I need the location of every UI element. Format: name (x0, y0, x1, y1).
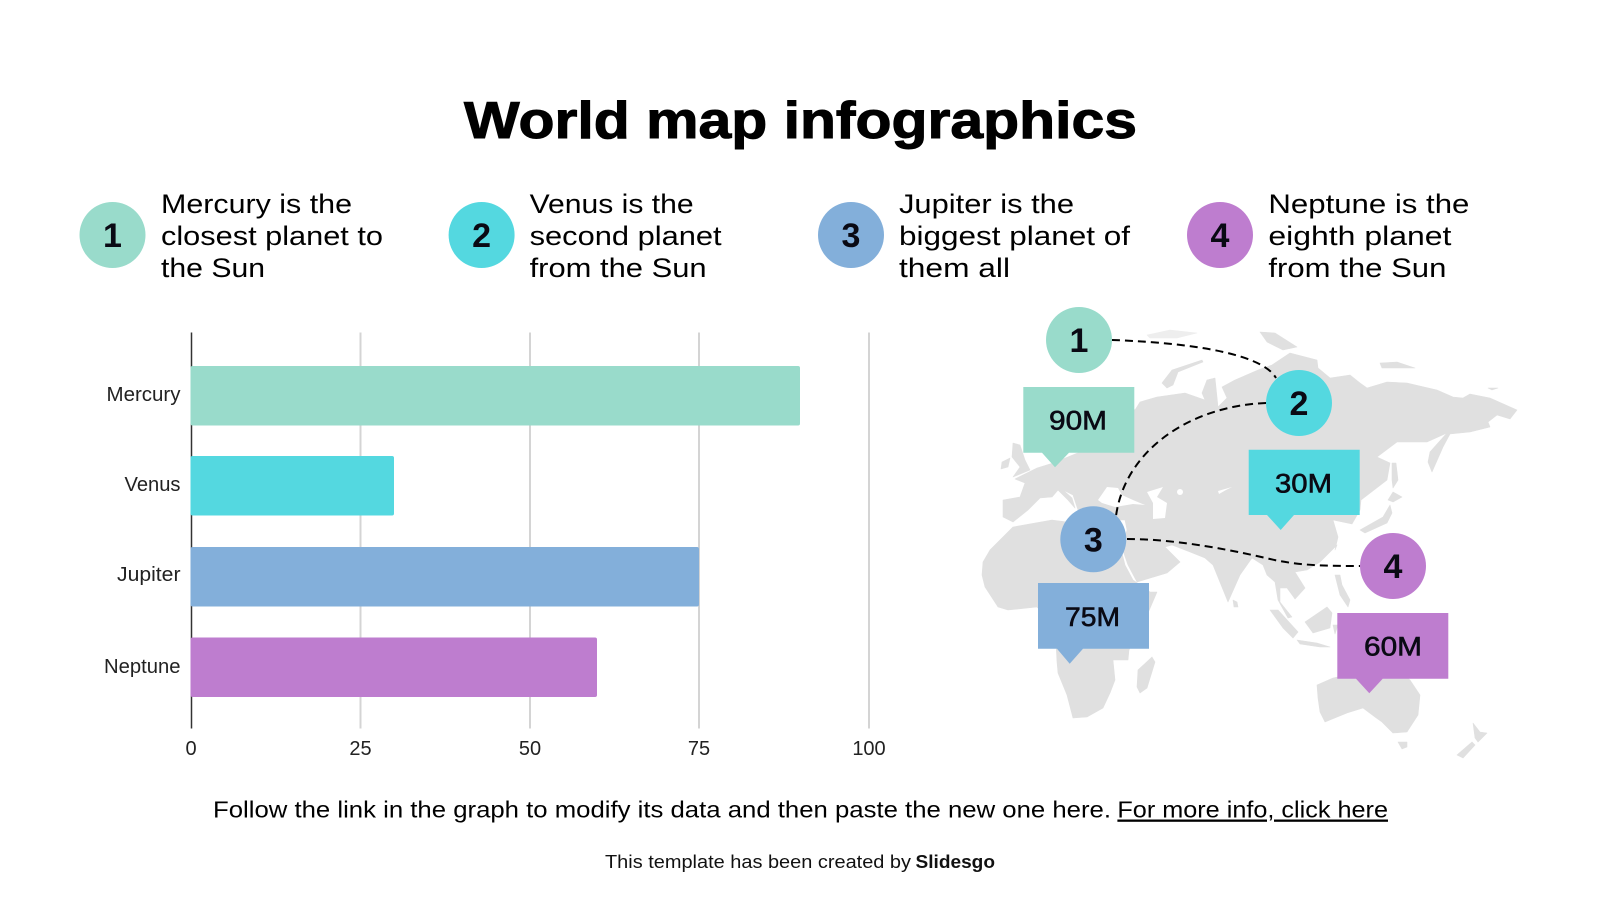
callout: 90M: 90M (1049, 405, 1107, 435)
legend text 1: Mercury is the (161, 189, 352, 219)
value axis labels: 0 (185, 738, 197, 760)
bar chart (104, 332, 886, 760)
legend text 4: eighth planet (1268, 221, 1452, 251)
map marker 1: 1 (1070, 322, 1088, 360)
callout: 75M: 75M (1065, 602, 1120, 632)
legend item 1: Mercury (80, 189, 383, 283)
map marker 2 (1266, 370, 1332, 436)
legend text 1 (161, 189, 383, 283)
title: World map infographics (464, 92, 1137, 150)
bar: Mercury 90 (190, 366, 800, 426)
category labels: Neptune (104, 656, 180, 678)
map marker 1 (1046, 307, 1112, 373)
legend badge 4 (1187, 202, 1253, 268)
legend text 1: the Sun (161, 253, 265, 283)
value axis labels: 25 (349, 738, 372, 760)
category labels: Mercury (106, 384, 180, 406)
callout: 75M (1038, 583, 1149, 664)
footer instruction text: Follow the link in the graph to modify its data and then paste the new one here. (213, 796, 1111, 822)
category labels (104, 384, 181, 678)
map marker 4: 4 (1384, 548, 1403, 586)
route: 2 to 3 (1116, 403, 1266, 516)
legend text 2: second planet (530, 221, 722, 251)
map marker 3 (1060, 506, 1126, 572)
bar: Jupiter 75 (190, 547, 699, 606)
value axis labels: 100 (852, 738, 886, 760)
legend item 3: Jupiter (818, 189, 1131, 283)
inland seas (1098, 487, 1232, 519)
legend badge 3: 3 (842, 217, 860, 255)
landmass: Australia (1317, 672, 1420, 733)
legend text 2 (530, 189, 722, 283)
callout: 90M (1023, 387, 1134, 467)
landmass: Eurasia (1003, 353, 1517, 618)
callout: 60M: 60M (1364, 632, 1422, 662)
legend text 2: from the Sun (530, 253, 707, 283)
legend badge 1 (80, 202, 146, 268)
legend text 4: Neptune is the (1268, 189, 1469, 219)
callout: 30M: 30M (1275, 468, 1332, 498)
footer instruction text (213, 796, 1388, 822)
legend item 2: Venus (449, 189, 722, 283)
legend text 3: Jupiter is the (899, 189, 1074, 219)
route: 3 to 4 (1127, 539, 1360, 566)
legend badge 2: 2 (472, 217, 491, 255)
credit line: Slidesgo (916, 851, 995, 872)
legend text 2: Venus is the (530, 189, 694, 219)
link text: For more info, click here (1117, 796, 1388, 822)
map marker 4 (1360, 533, 1426, 599)
bar: Venus 30 (190, 456, 394, 516)
legend text 4: from the Sun (1268, 253, 1446, 283)
legend badge 3 (818, 202, 884, 268)
legend badge 1: 1 (103, 217, 122, 255)
callout: 30M (1249, 450, 1360, 530)
legend text 3: biggest planet of (899, 221, 1131, 251)
value axis labels: 75 (688, 738, 710, 760)
route: 1 to 2 (1112, 340, 1276, 378)
callout: 60M (1337, 613, 1448, 693)
map marker 2: 2 (1290, 385, 1308, 423)
legend text 3 (899, 189, 1131, 283)
credit line: This template has been created by (605, 851, 912, 872)
legend badge 2 (449, 202, 515, 268)
category labels: Jupiter (117, 564, 181, 586)
category labels: Venus (124, 474, 180, 496)
islands (1001, 330, 1498, 758)
landmass: Africa (982, 520, 1157, 718)
world map: Europe, Asia, Africa, Oceania (982, 307, 1517, 758)
legend badge 4: 4 (1211, 217, 1230, 255)
legend text 4 (1268, 189, 1469, 283)
value axis labels: 50 (519, 738, 541, 760)
bar: Neptune 60 (190, 638, 597, 697)
legend text 1: closest planet to (161, 221, 383, 251)
value axis labels (185, 738, 886, 760)
legend text 3: them all (899, 253, 1010, 283)
map marker 3: 3 (1084, 521, 1103, 559)
legend item 4: Neptune (1187, 189, 1469, 283)
